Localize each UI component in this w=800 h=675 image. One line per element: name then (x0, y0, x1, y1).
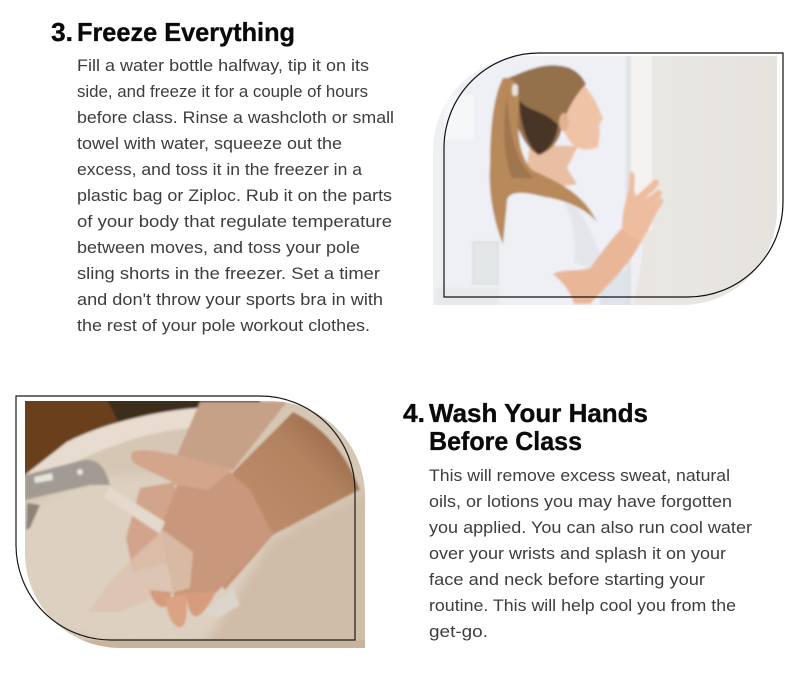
text block: wash your hands body: face and neck before starting your (429, 570, 706, 589)
photo outline (16, 396, 355, 640)
text block: wash your hands body: get-go. (429, 622, 488, 641)
heading: 3. Freeze Everything: Freeze Everything (77, 17, 295, 47)
soap dish (205, 590, 240, 618)
ponytail (490, 78, 597, 244)
face (558, 83, 603, 150)
arm (553, 228, 642, 304)
text block: wash your hands body: over your wrists and splash it on your (429, 544, 727, 563)
text block: freeze everything body: excess, and toss it in the freezer in a (77, 160, 363, 179)
photo outline (444, 53, 783, 297)
upper arm (177, 402, 287, 470)
photo: woman leaning on a wall (425, 48, 785, 313)
text block: wash your hands body: oils, or lotions you may have forgotten (429, 492, 732, 511)
text block: freeze everything body: towel with water, squeeze out the (77, 134, 342, 153)
text block: freeze everything body: side, and freeze it for a couple of hours (77, 82, 368, 101)
text block: wash your hands body: routine. This will help cool you from the (429, 596, 736, 615)
heading: 4. Wash Your Hands Before Class: 4. (403, 398, 425, 428)
text block: wash your hands body: This will remove excess sweat, natural (429, 466, 730, 485)
text block: freeze everything body: and don't throw your sports bra in with (77, 290, 383, 309)
shirt (500, 290, 504, 305)
photo: hands under a faucet (0, 396, 370, 652)
text block: wash your hands body: you applied. You can also run cool water (429, 518, 753, 537)
ear (559, 113, 569, 131)
heading: 4. Wash Your Hands Before Class (403, 398, 648, 456)
dark counter (25, 401, 169, 476)
text block: wash your hands body (429, 466, 753, 641)
text block: freeze everything body: of your body that regulate temperature (77, 212, 392, 231)
far hand (126, 482, 175, 572)
heading: 4. Wash Your Hands Before Class: Wash Your Hands (429, 398, 648, 428)
text block: freeze everything body: before class. Rinse a washcloth or small (77, 108, 394, 127)
water stream (104, 487, 165, 534)
glass (473, 242, 498, 284)
text block: freeze everything body: plastic bag or Ziploc. Rub it on the parts (77, 186, 392, 205)
splashing water (88, 530, 193, 612)
fingers bottom (150, 590, 172, 607)
thumb (131, 450, 232, 490)
text block: freeze everything body (77, 56, 394, 335)
text block: freeze everything body: between moves, and toss your pole (77, 238, 360, 257)
text block: freeze everything body: Fill a water bottle halfway, tip it on its (77, 56, 369, 75)
neck (525, 145, 578, 186)
text block: freeze everything body: the rest of your pole workout clothes. (77, 316, 370, 335)
heading: 3. Freeze Everything: 3. (51, 17, 73, 47)
palm (160, 468, 273, 600)
heading: 4. Wash Your Hands Before Class: Before Class (429, 426, 582, 456)
lower arm (222, 411, 361, 590)
hand (622, 172, 663, 240)
sink rim (26, 406, 198, 475)
text block: freeze everything body: sling shorts in the freezer. Set a timer (77, 264, 381, 283)
faucet (25, 460, 110, 500)
hair (505, 65, 586, 155)
